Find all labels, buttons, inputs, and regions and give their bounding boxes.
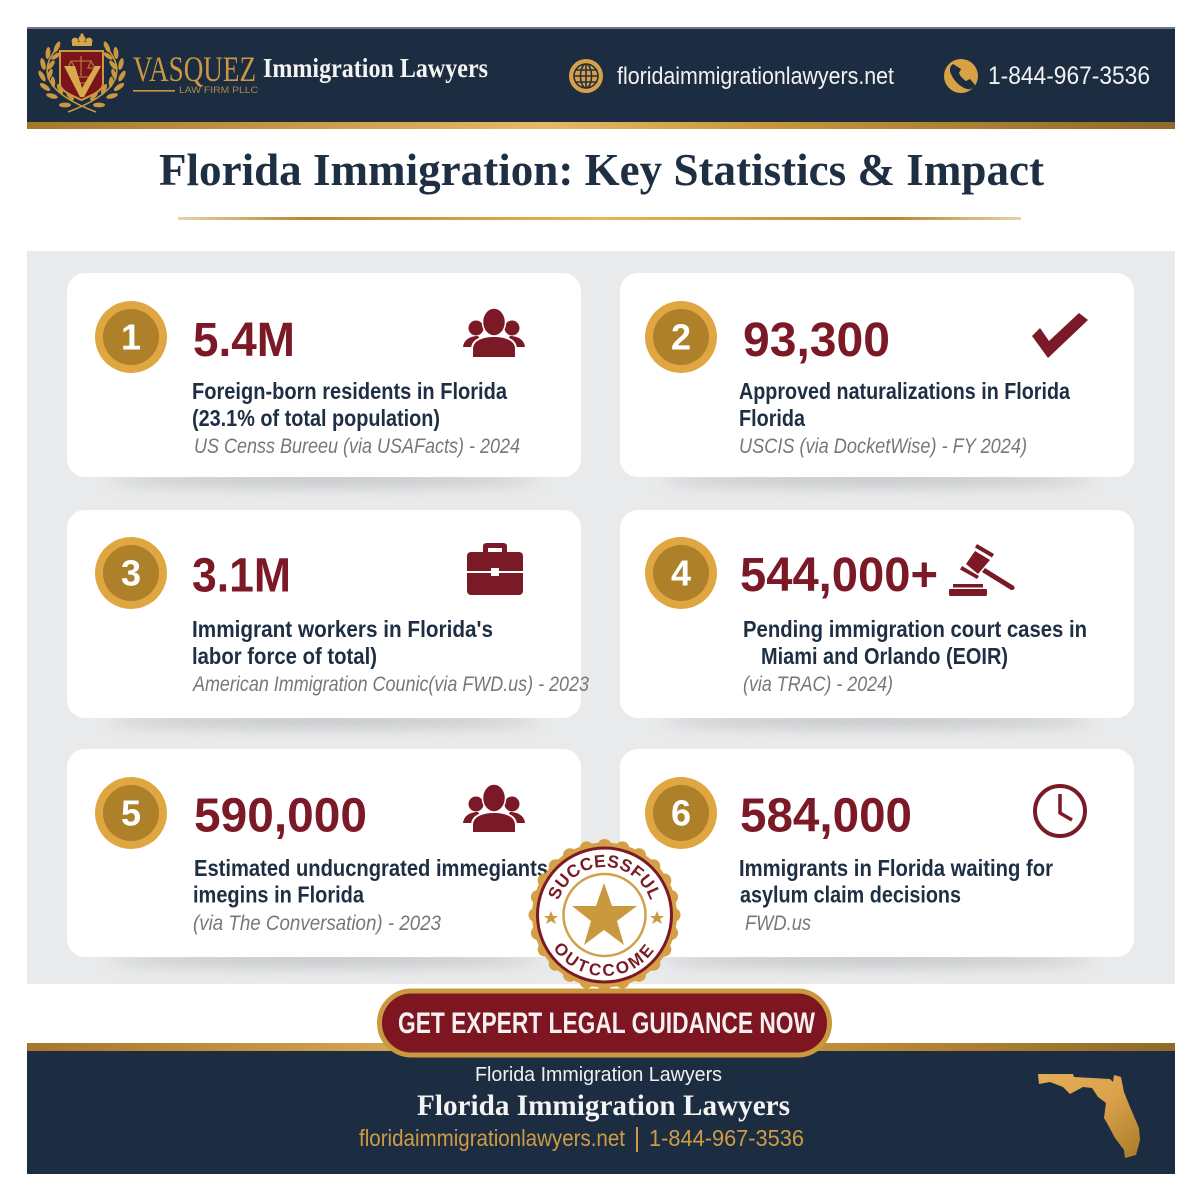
description: Estimated unducngrated immegiants: [194, 855, 548, 881]
source: FWD.us: [745, 912, 811, 935]
stat 5.4M: 5.4M: [193, 314, 295, 367]
description: Immigrants in Florida waiting for: [739, 855, 1053, 881]
number badge 2: 2: [671, 316, 691, 358]
shield letter V: [64, 66, 101, 97]
description: asylum claim decisions: [740, 882, 961, 908]
logo rule: [133, 90, 175, 92]
source: American Immigration Counic(via FWD.us) - 2023: [191, 673, 589, 696]
description: [739, 855, 1053, 908]
seal: successful outcome: [528, 839, 680, 988]
number badge 5: 5: [121, 792, 141, 834]
number badge 4: 4: [671, 552, 691, 594]
number badge 3: 3: [121, 552, 141, 594]
number badge 6: [645, 777, 717, 849]
description: Florida: [739, 405, 805, 431]
stat 93,300: 93,300: [743, 314, 890, 367]
footer band: [27, 1043, 1175, 1174]
description: [739, 378, 1070, 431]
number badge 1: 1: [121, 316, 141, 358]
description: Approved naturalizations in Florida: [739, 378, 1070, 404]
website: floridaimmigrationlawyers.net: [617, 63, 894, 90]
seal text bottom: OUTCCOME: [555, 943, 654, 976]
number badge 1: [95, 301, 167, 373]
card 6: asylum claims: [620, 749, 1134, 966]
description: labor force of total): [192, 643, 377, 669]
header band: [27, 27, 1175, 129]
laurel wreath right: [68, 41, 127, 112]
crown: [72, 33, 92, 46]
icon: phone: [944, 59, 978, 93]
source: (via TRAC) - 2024): [743, 673, 893, 696]
button label: GET EXPERT LEGAL GUIDANCE NOW: [398, 1007, 816, 1040]
seal star: [572, 883, 637, 945]
call-to-action button: [380, 991, 830, 1055]
icon: clock: [1035, 786, 1085, 836]
card 5: undocumented immigrants: [67, 749, 581, 966]
icon: globe: [569, 59, 603, 93]
icon: briefcase: [467, 543, 523, 595]
phone number: 1-844-967-3536: [988, 62, 1150, 90]
source: (via The Conversation) - 2023: [193, 912, 441, 935]
description: [192, 616, 493, 669]
title: Florida Immigration: Key Statistics & Impact: [159, 144, 1045, 195]
footer small heading: Florida Immigration Lawyers: [475, 1064, 722, 1086]
source: US Censs Bureeu (via USAFacts) - 2024: [194, 435, 520, 458]
icon: people: [463, 308, 525, 358]
description: imegins in Florida: [193, 882, 364, 908]
card 1: foreign-born residents: [67, 273, 581, 486]
description: Immigrant workers in Florida's: [192, 616, 493, 642]
icon: check mark: [1032, 313, 1088, 358]
firm name: Immigration Lawyers: [263, 53, 488, 83]
shield: [60, 51, 103, 100]
card 3: immigrant workers: [67, 510, 589, 727]
source: USCIS (via DocketWise) - FY 2024): [739, 435, 1027, 458]
laurel wreath left: [37, 41, 96, 112]
footer website: floridaimmigrationlawyers.net: [359, 1125, 626, 1151]
icon: gavel: [949, 544, 1015, 596]
number badge 2: [645, 301, 717, 373]
card 4: pending court cases: [620, 510, 1134, 727]
description: [192, 378, 507, 431]
number badge 6: 6: [671, 792, 691, 834]
logo wordmark VASQUEZ: VASQUEZ: [133, 49, 256, 89]
number badge 5: [95, 777, 167, 849]
stat 584,000: 584,000: [740, 790, 912, 842]
description: Miami and Orlando (EOIR): [761, 643, 1008, 669]
footer firm name: Florida Immigration Lawyers: [417, 1089, 790, 1122]
footer phone: 1-844-967-3536: [649, 1125, 804, 1151]
stat 544,000+: 544,000+: [740, 549, 938, 602]
description: [743, 616, 1087, 669]
description: (23.1% of total population): [192, 405, 440, 431]
card 2: naturalizations: [620, 273, 1134, 486]
seal text top: SUCCESSFUL: [548, 854, 659, 900]
stat 590,000: 590,000: [194, 790, 367, 842]
panel: statistics background: [27, 251, 1175, 984]
icon: Florida map: [1038, 1074, 1140, 1158]
description: [193, 855, 548, 908]
icon: people: [463, 784, 525, 833]
logo subline: LAW FIRM PLLC: [179, 85, 258, 96]
shield crest: [68, 56, 95, 83]
number badge 4: [645, 537, 717, 609]
number badge 3: [95, 537, 167, 609]
logo emblem: [37, 33, 127, 112]
seal small stars: [544, 911, 664, 924]
stat 3.1M: 3.1M: [192, 550, 291, 602]
description: Pending immigration court cases in: [743, 616, 1087, 642]
description: Foreign-born residents in Florida: [192, 378, 507, 404]
